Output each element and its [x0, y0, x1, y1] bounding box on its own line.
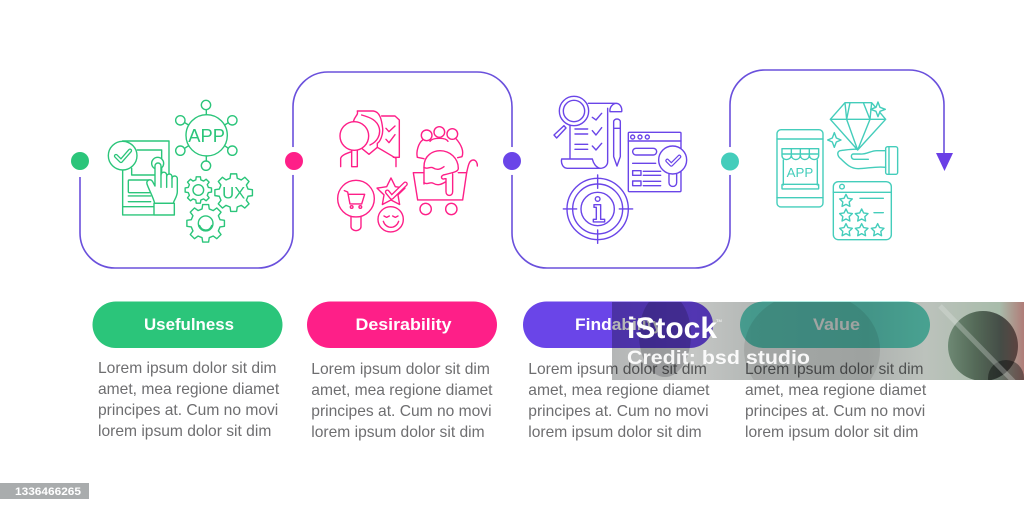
icon: usefulness app and UX: UX: [222, 184, 245, 203]
text block: usefulness description: amet, mea regione diamet: [98, 381, 280, 398]
text block: findability description: amet, mea regione diamet: [528, 382, 710, 399]
step marker: purple dot: [503, 152, 521, 170]
text block: findability description: Lorem ipsum dolor sit dim: [528, 361, 707, 378]
heading pill: desirability: Desirability: [356, 315, 452, 334]
text block: findability description: lorem ipsum dolor sit dim: [528, 424, 702, 441]
icon: desirability shoppers: [338, 111, 477, 232]
panel: usefulness: [92, 302, 284, 440]
icon: value gem and ratings: APP: [787, 165, 813, 180]
text block: desirability description: Lorem ipsum dolor sit dim: [311, 361, 490, 378]
watermark logo: iStock: [627, 312, 717, 345]
heading pill: usefulness: [92, 302, 282, 348]
step marker: teal dot: [721, 152, 739, 170]
text block: usefulness description: Lorem ipsum dolor sit dim: [98, 360, 277, 377]
heading pill: findability: Findability: [575, 315, 663, 334]
heading pill: desirability: [307, 302, 497, 348]
heading pill: value: Value: [813, 315, 860, 334]
icon: findability search and info: [554, 96, 687, 243]
watermark credit: Credit: bsd studio: [627, 348, 810, 369]
panel: value: [740, 302, 930, 441]
step marker: green dot: [71, 152, 89, 170]
icon: value gem and ratings: [777, 102, 898, 240]
image id tag: 1336466265: [15, 486, 81, 498]
icon: usefulness app and UX: APP: [188, 125, 225, 146]
panel: desirability: [307, 302, 497, 441]
text block: usefulness description: principes at. Cum no movi: [98, 402, 278, 419]
text block: value description: amet, mea regione diamet: [745, 382, 927, 399]
text block: value description: lorem ipsum dolor sit dim: [745, 424, 918, 441]
text block: value description: Lorem ipsum dolor sit dim: [745, 361, 924, 378]
heading pill: usefulness: Usefulness: [144, 315, 234, 334]
watermark logo: TM: [716, 318, 722, 323]
text block: usefulness description: lorem ipsum dolor sit dim: [98, 423, 271, 440]
image id tag: [0, 483, 89, 499]
icon: usefulness app and UX: [108, 100, 252, 242]
watermark band: [612, 302, 1024, 380]
text block: desirability description: amet, mea regione diamet: [311, 382, 493, 399]
heading pill: findability: [523, 302, 713, 348]
text block: findability description: principes at. Cum no movi: [528, 403, 709, 420]
panel: findability: [523, 302, 714, 441]
text block: value description: principes at. Cum no movi: [745, 403, 925, 420]
text block: desirability description: lorem ipsum dolor sit dim: [311, 424, 485, 441]
text block: desirability description: principes at. Cum no movi: [311, 403, 492, 420]
heading pill: value: [740, 302, 930, 348]
step marker: pink dot: [285, 152, 303, 170]
connector line with arrow: [80, 70, 953, 268]
